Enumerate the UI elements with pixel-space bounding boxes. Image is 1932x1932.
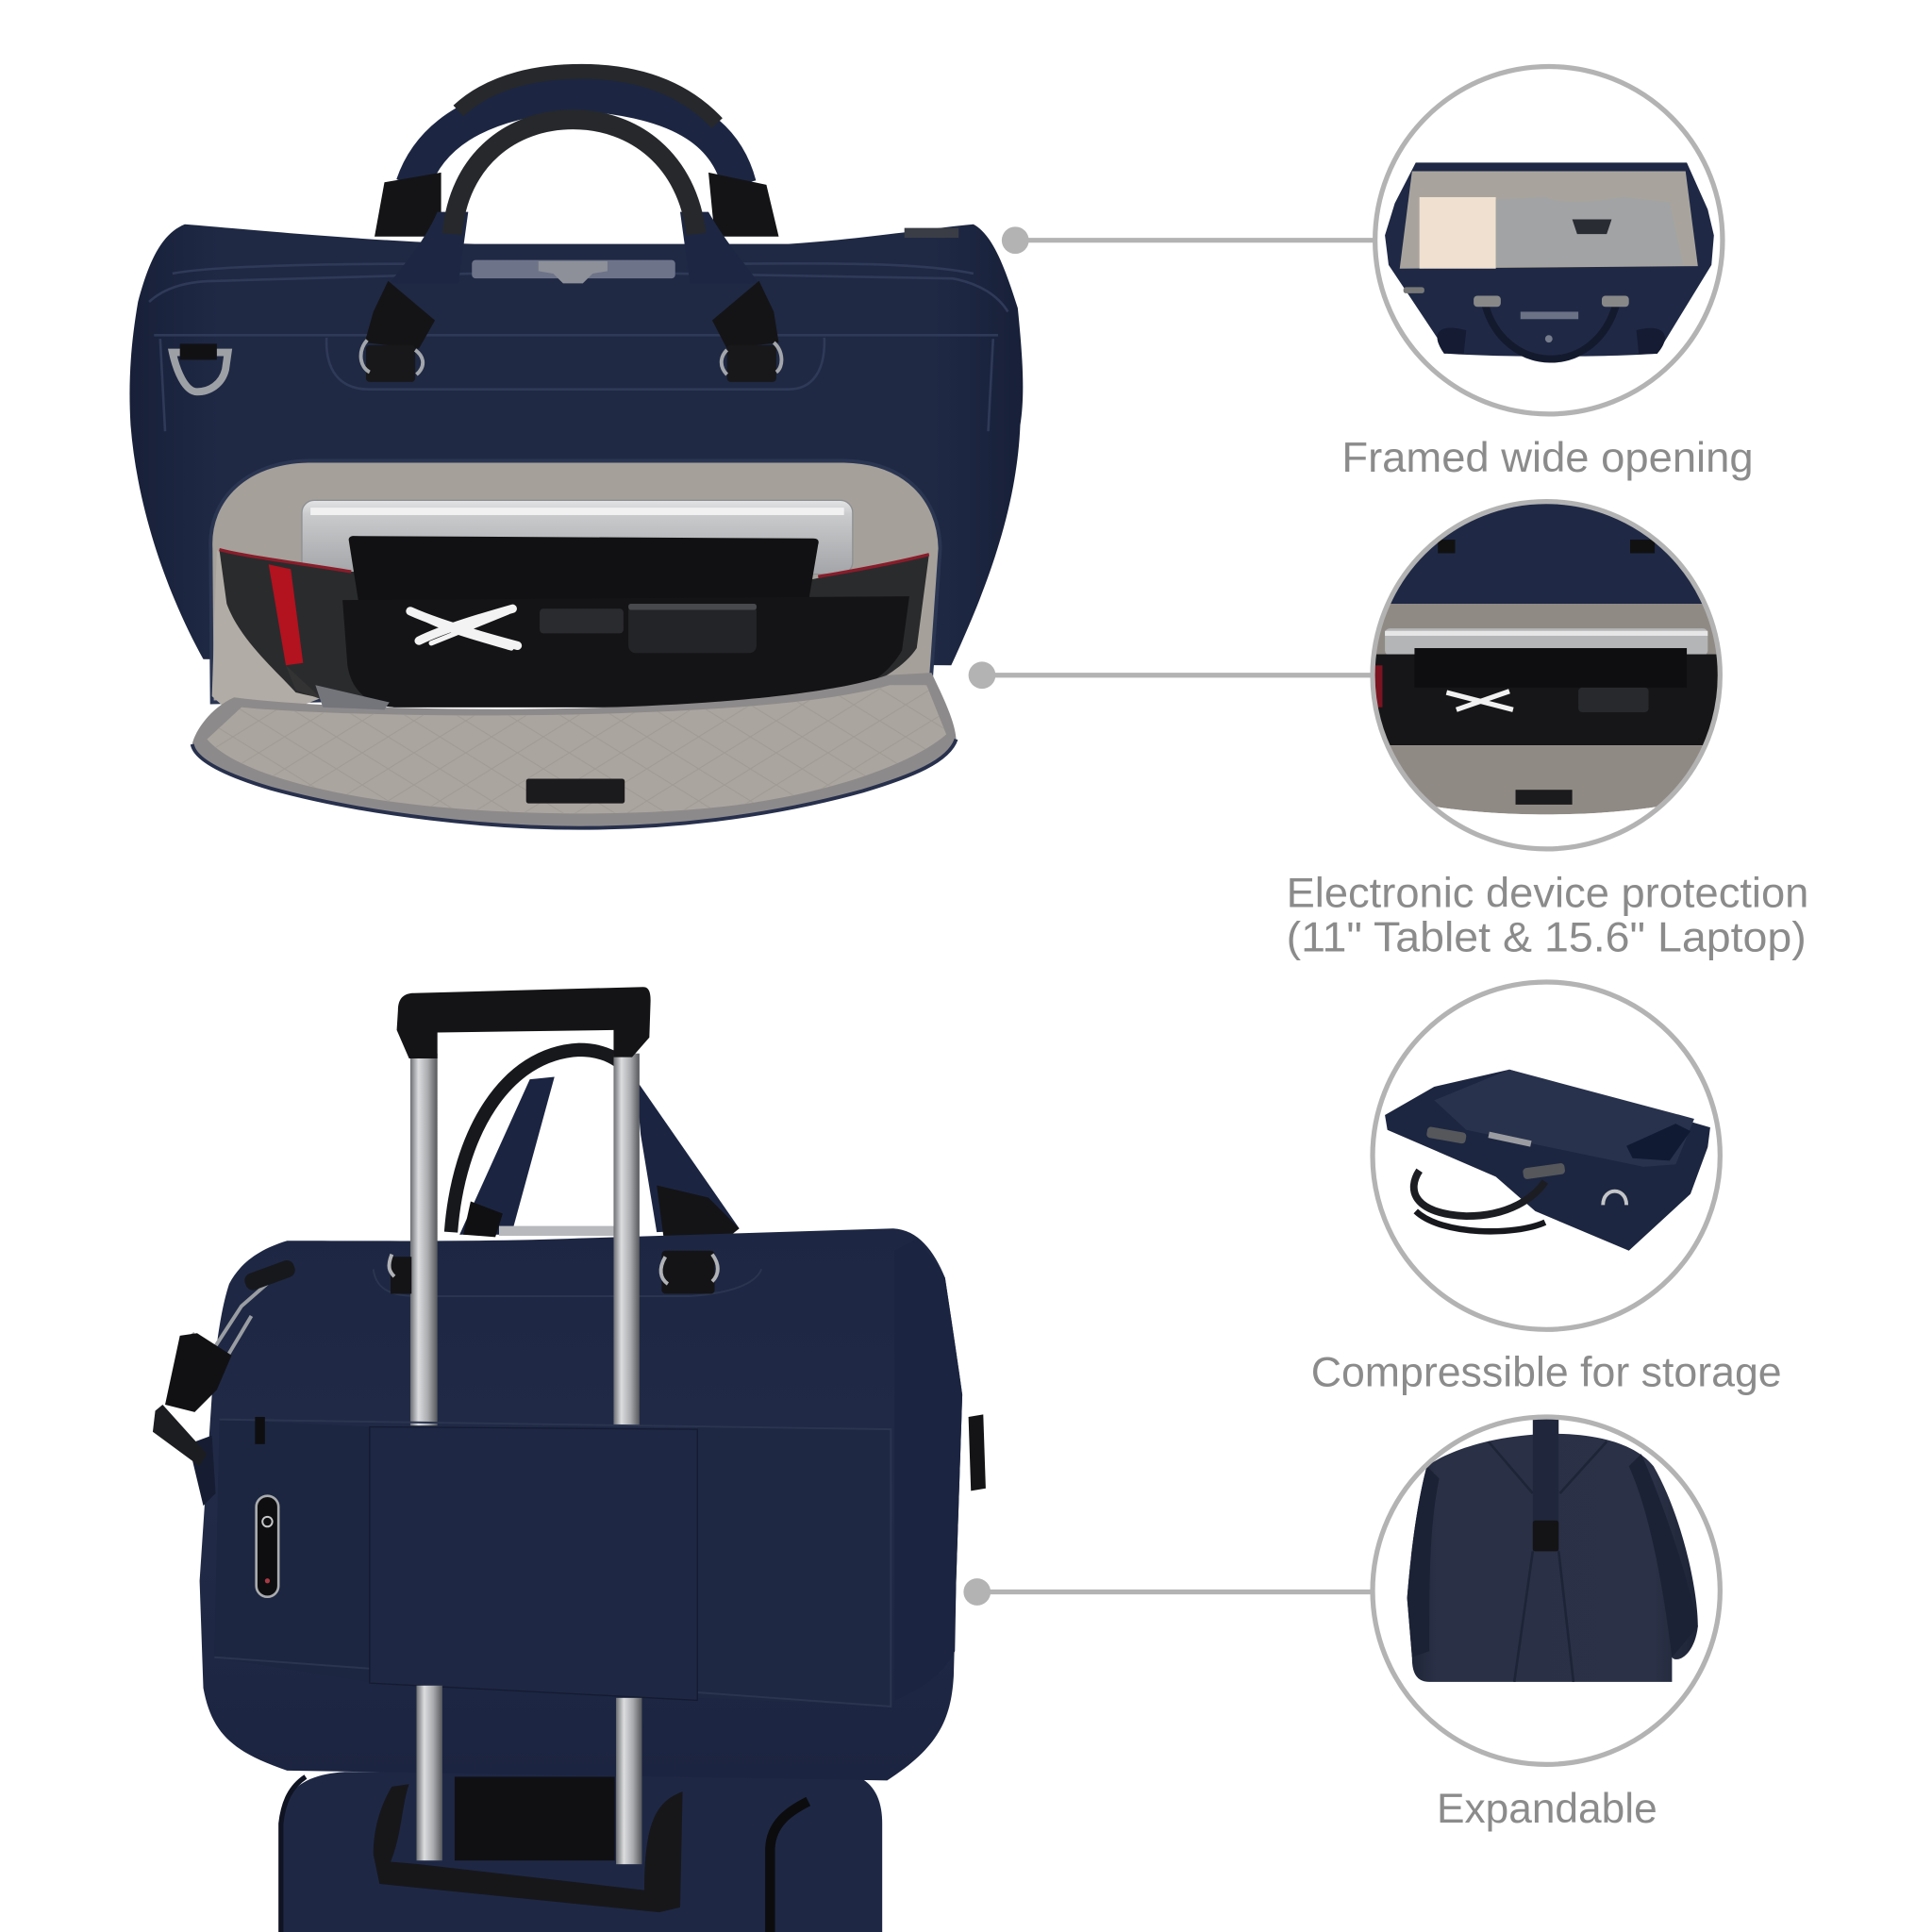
zipper pull on pocket	[315, 685, 390, 709]
bag body	[129, 225, 1023, 665]
detail circle: electronic device protection	[1368, 499, 1725, 862]
top zipper band and seams	[149, 263, 1008, 431]
trolley handle base	[374, 1776, 683, 1912]
detail circle: expandable	[1373, 1417, 1720, 1764]
tablet	[349, 536, 819, 610]
shoulder strap and snap hook	[153, 1258, 297, 1506]
open pocket lining	[210, 460, 941, 702]
callout line 3	[963, 1578, 1373, 1606]
device: phone	[628, 604, 757, 653]
main photo: bag mounted on trolley	[153, 987, 986, 1932]
label: electronic device protection	[1287, 870, 1808, 960]
seam around handle pad	[374, 1269, 761, 1296]
zip pull	[255, 1417, 265, 1444]
side lining panels	[212, 550, 323, 727]
label: electronic device protection: (11" Tablet & 15.6" Laptop)	[1287, 914, 1807, 960]
front mesh pocket	[342, 596, 909, 708]
white cables	[410, 608, 518, 648]
label: compressible for storage: Compressible for storage	[1311, 1349, 1782, 1395]
bag body rear view	[200, 1228, 962, 1780]
callout line 1	[1002, 226, 1375, 254]
bag handles behind trolley	[451, 1050, 740, 1253]
trolley upper poles	[410, 1054, 640, 1425]
open flap	[192, 673, 957, 828]
front handle	[361, 120, 781, 382]
side fold	[894, 1239, 962, 1700]
trolley lower poles	[416, 1686, 641, 1864]
detail circle: compressible for storage	[1373, 982, 1720, 1329]
rear tab	[969, 1414, 986, 1491]
strap tabs and rings	[389, 1251, 718, 1293]
back handle	[375, 72, 778, 237]
detail circle: framed wide opening	[1375, 67, 1723, 414]
label: electronic device protection: Electronic device protection	[1287, 870, 1808, 916]
logo pill	[257, 1496, 278, 1597]
label: expandable: Expandable	[1437, 1786, 1657, 1832]
callout line 2	[969, 661, 1373, 689]
label: framed wide opening: Framed wide opening	[1341, 435, 1754, 481]
trolley sleeve	[370, 1426, 697, 1700]
device: small battery	[540, 608, 624, 633]
laptop	[302, 500, 853, 575]
D-ring strap attachment	[173, 343, 228, 391]
organizer panel	[219, 550, 929, 708]
suitcase below	[281, 1772, 882, 1932]
zipper plate and pulls	[472, 228, 958, 283]
main photo: open briefcase with laptop compartment	[129, 72, 1023, 828]
trolley grip	[397, 987, 651, 1058]
back pocket panel	[214, 1420, 891, 1707]
